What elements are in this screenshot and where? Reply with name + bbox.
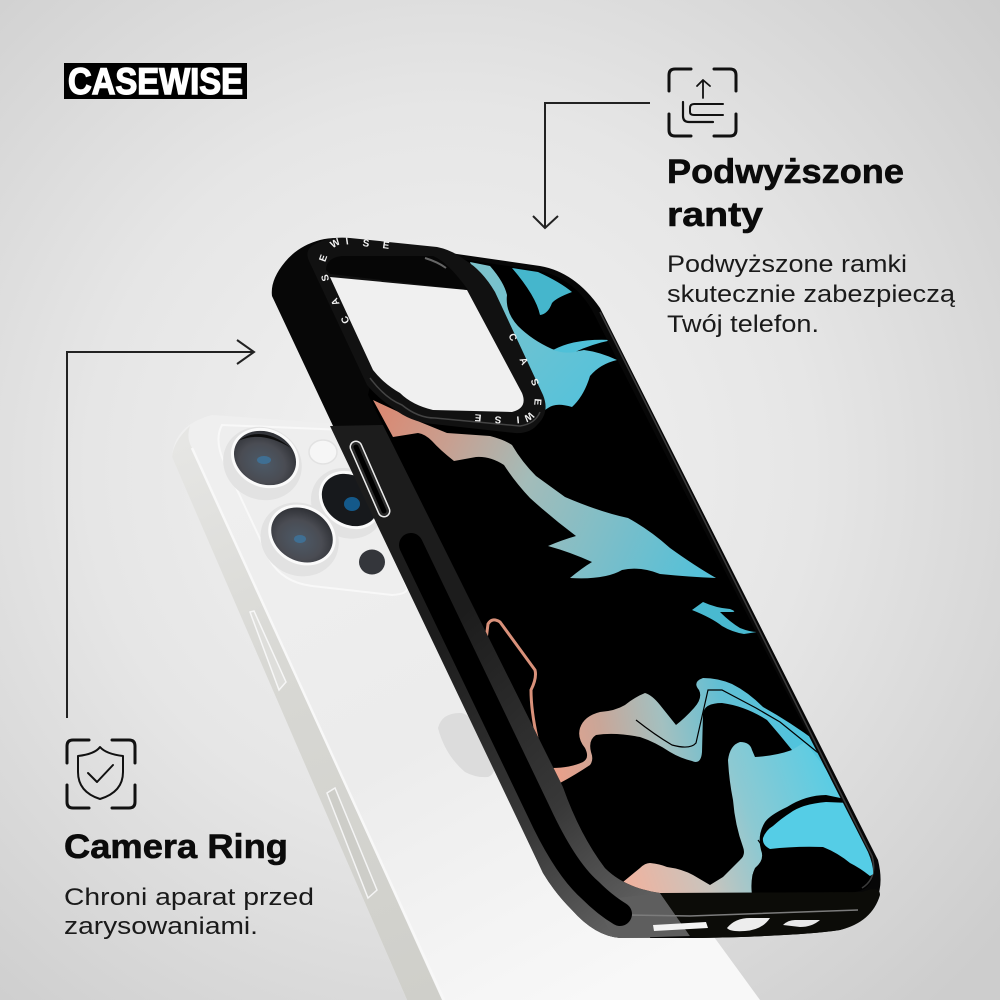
large blob: [623, 742, 850, 895]
ring text: I: [345, 236, 349, 248]
arrow: to camera ring: [67, 340, 254, 718]
ring lower lip: [370, 378, 540, 426]
ring text: S: [320, 273, 332, 282]
text: camera ring description: zarysowaniami.: [64, 913, 258, 940]
ring text: [318, 236, 543, 425]
text: camera ring description: [64, 884, 314, 940]
ring outer: [307, 238, 546, 433]
ring text: S: [362, 238, 370, 250]
lens blue glint top: [257, 456, 271, 464]
pattern: marble shapes: [373, 262, 880, 895]
lens bottom: [247, 489, 352, 590]
case volume button: [356, 447, 384, 511]
heading: raised edges: [667, 153, 904, 234]
ring text: C: [506, 332, 519, 343]
ring text: E: [318, 253, 330, 263]
ring text: A: [329, 296, 342, 307]
ring text: W: [521, 409, 535, 424]
heading: raised edges: ranty: [667, 196, 763, 234]
side button lower: [327, 788, 377, 898]
translucent lower side wall: [330, 425, 660, 938]
text: raised edges description: skutecznie zabezpieczą: [667, 281, 956, 308]
teal area under ring: [470, 262, 617, 420]
heading: camera ring: Camera Ring: [64, 828, 288, 866]
lens top crescent: [238, 434, 291, 448]
thin black line: [636, 690, 822, 893]
icon: raised layers: [669, 69, 736, 136]
back plate rim right: [600, 312, 874, 888]
ring text: A: [517, 356, 530, 367]
sensor: [359, 550, 385, 574]
lower right blob: [763, 802, 880, 876]
text: raised edges description: Podwyższone ramki: [667, 251, 907, 278]
case body: [272, 238, 881, 938]
ring text: S: [528, 377, 541, 388]
text: raised edges description: [667, 251, 956, 338]
white phone: [172, 414, 760, 1000]
edge highlight: [192, 448, 444, 1000]
ring text: E: [531, 398, 543, 406]
peach thin line: [486, 620, 537, 738]
back plate: [368, 250, 873, 893]
lens right: [297, 454, 398, 553]
teal small streak: [692, 602, 757, 634]
port hole middle: [727, 918, 770, 931]
logo: CASEWISE: [68, 61, 243, 102]
ring text: S: [494, 413, 502, 425]
ring text: I: [516, 413, 520, 425]
bottom highlight: [625, 910, 858, 916]
lens blue glint bottom: [294, 535, 306, 543]
ring window: [330, 277, 524, 412]
river peach to teal: [373, 400, 716, 578]
phone side edge: [172, 426, 442, 1000]
lens blue glint right: [344, 497, 360, 511]
camera bump: [218, 425, 407, 595]
ring text: C: [339, 314, 352, 325]
ring text: E: [474, 411, 482, 423]
teal wisp top: [512, 268, 572, 315]
phone back: [172, 415, 760, 1000]
arrow: to raised edges: [533, 103, 650, 228]
side button upper: [250, 611, 286, 690]
text: raised edges description: Twój telefon.: [667, 311, 819, 338]
teal wisp right: [553, 340, 612, 353]
phone case: [272, 238, 881, 938]
apple logo: [438, 713, 495, 777]
port hole right: [783, 920, 820, 927]
side slot: [411, 545, 620, 914]
ring inner highlight: [425, 258, 446, 268]
dark bottom strip: [660, 889, 880, 938]
icon: shield: [67, 740, 135, 808]
wave ribbon: [554, 678, 830, 782]
port hole left: [653, 922, 708, 931]
ring inner wall: [326, 256, 468, 290]
ring text: W: [329, 236, 343, 251]
text: camera ring description: Chroni aparat przed: [64, 884, 314, 911]
heading: raised edges: Podwyższone: [667, 153, 904, 191]
camera ring: [307, 236, 546, 433]
lens top: [211, 414, 314, 513]
flash: [309, 440, 337, 464]
ring text: E: [382, 240, 390, 252]
translucent bottom strip: [600, 893, 690, 938]
